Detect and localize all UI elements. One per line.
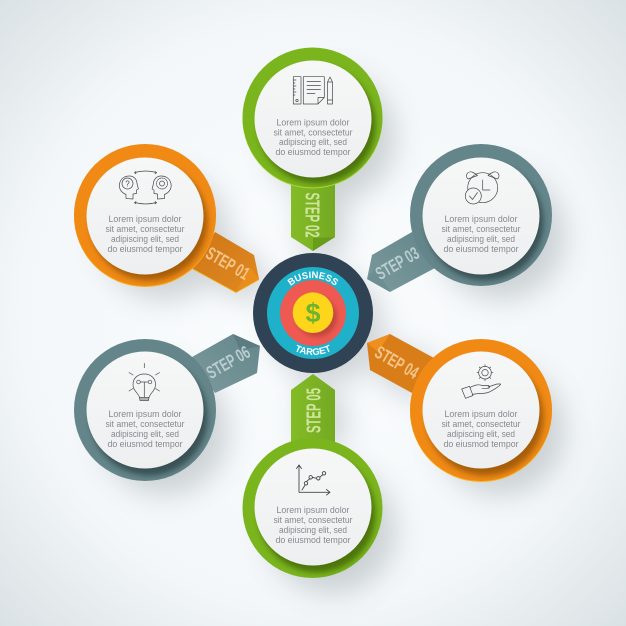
step 06 text	[106, 408, 184, 449]
icon: two heads	[119, 171, 171, 204]
step 05 ring	[242, 438, 382, 578]
step 06 text: Lorem ipsum dolor	[108, 408, 182, 419]
step 03 text: sit amet, consectetur	[442, 223, 520, 234]
step 04 ring	[410, 339, 552, 482]
icon: dollar sign: $	[305, 298, 321, 328]
central target	[253, 253, 373, 373]
icon: alarm clock	[465, 172, 499, 204]
step 05 text	[274, 504, 352, 545]
step 06 arrow	[192, 334, 260, 393]
step 02 text: do eiusmod tempor	[276, 146, 350, 157]
step 05 arrow: STEP 05	[303, 388, 325, 433]
step 05 disc	[254, 448, 372, 566]
icon: ruler, document, pencil	[293, 77, 332, 104]
target cyan ring	[267, 267, 359, 359]
step 02 arrow	[291, 180, 335, 251]
step 04 disc	[422, 352, 540, 468]
step 05 text: Lorem ipsum dolor	[276, 504, 350, 515]
step 02 text: Lorem ipsum dolor	[276, 116, 350, 128]
icon: two heads: ?	[125, 180, 130, 188]
step 04 text	[442, 408, 520, 449]
icon: line chart	[296, 465, 330, 495]
step 04 arrow: STEP 04	[371, 342, 422, 383]
target red ring	[280, 280, 346, 346]
step 03 ring	[410, 144, 552, 286]
step 01 arrow	[192, 232, 259, 293]
step 02 text: adipiscing elit, sed	[279, 136, 347, 147]
step 01 text	[106, 213, 184, 254]
step 04 text: adipiscing elit, sed	[447, 428, 515, 439]
icon: light bulb	[129, 363, 160, 400]
target yellow disc	[293, 292, 333, 333]
step 02 disc	[254, 60, 372, 178]
step 01 arrow: STEP 01	[202, 243, 253, 284]
step 04 text: Lorem ipsum dolor	[444, 408, 518, 419]
step 05 panel	[242, 374, 382, 578]
target dark ring	[253, 253, 373, 373]
icon: hand with gear	[462, 365, 501, 398]
step 03 text: adipiscing elit, sed	[447, 233, 515, 244]
target label: target: TARGET	[296, 344, 330, 356]
step 06 text: adipiscing elit, sed	[111, 428, 179, 439]
step 06 arrow: STEP 06	[203, 342, 254, 383]
step 01 panel	[74, 144, 259, 293]
step 06 text: do eiusmod tempor	[108, 438, 182, 449]
step 05 text: adipiscing elit, sed	[279, 524, 347, 535]
step 01 text: Lorem ipsum dolor	[108, 213, 182, 224]
step 03 disc	[422, 158, 540, 274]
step 03 text: do eiusmod tempor	[444, 243, 518, 254]
step 01 text: do eiusmod tempor	[108, 243, 182, 254]
step 03 panel	[367, 144, 552, 292]
step 04 panel	[367, 334, 552, 482]
step 04 text: do eiusmod tempor	[444, 438, 518, 449]
target shadow	[297, 297, 337, 337]
step 02 text	[274, 116, 352, 157]
step 06 text: sit amet, consectetur	[106, 418, 184, 429]
cast shadows	[101, 74, 565, 594]
step 01 ring	[74, 144, 216, 287]
step 02 panel	[242, 48, 382, 251]
step 01 disc	[86, 158, 204, 274]
step 03 text: Lorem ipsum dolor	[444, 213, 518, 224]
step 01 text: sit amet, consectetur	[106, 223, 184, 234]
step 01 text: adipiscing elit, sed	[111, 233, 179, 244]
step 06 disc	[86, 352, 204, 468]
step 05 text: sit amet, consectetur	[274, 514, 352, 525]
step 05 arrow	[291, 374, 335, 445]
step 04 text: sit amet, consectetur	[442, 418, 520, 429]
step 02 arrow: STEP 02	[301, 192, 323, 238]
step 02 ring	[242, 48, 382, 188]
step 06 panel	[74, 334, 260, 481]
step 03 text	[442, 213, 520, 254]
target label: business: BUSINESS	[287, 271, 338, 286]
step 06 ring	[74, 339, 216, 481]
step 04 arrow	[367, 334, 434, 393]
step 02 text: sit amet, consectetur	[274, 126, 352, 137]
step 03 arrow: STEP 03	[372, 243, 423, 284]
step 05 text: do eiusmod tempor	[276, 534, 350, 545]
